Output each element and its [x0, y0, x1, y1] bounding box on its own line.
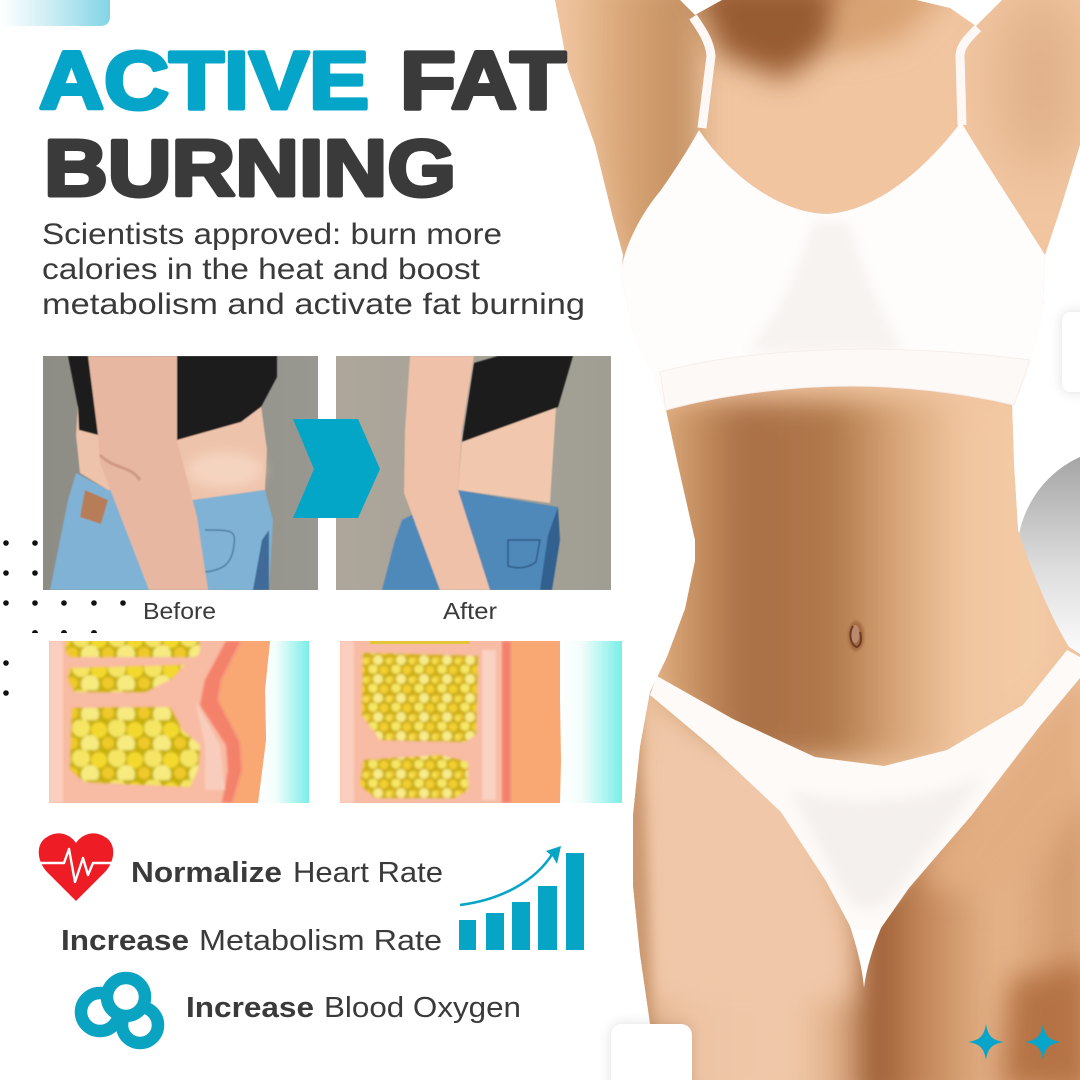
top-left accent bar — [0, 0, 110, 26]
fat tissue diagram: after — [340, 640, 622, 803]
dot grid — [3, 540, 126, 696]
bra straps — [693, 17, 978, 128]
text: increase metabolism rate: Metabolism Rate — [199, 925, 442, 957]
subtitle line 2: calories in the heat and boost — [42, 253, 481, 286]
skin — [540, 0, 1080, 1080]
gap between thighs — [850, 926, 881, 988]
decorative grey circle — [1017, 447, 1080, 663]
side card — [1062, 312, 1080, 392]
title word FAT: FAT — [400, 36, 566, 126]
text: normalize heart rate: Normalize — [131, 857, 282, 889]
navel — [848, 621, 864, 651]
after photo — [336, 356, 611, 590]
text: normalize heart rate: Heart Rate — [293, 857, 443, 889]
white bra — [621, 122, 1045, 410]
fat tissue diagram: before — [49, 639, 309, 803]
subtitle line 3: metabolism and activate fat burning — [42, 288, 585, 321]
sparkle stars — [968, 1024, 1061, 1060]
benefit: heart rate — [39, 833, 443, 901]
bottom card — [611, 1024, 692, 1080]
benefit: blood oxygen — [81, 978, 521, 1043]
icon: oxygen rings — [81, 978, 158, 1043]
text: increase blood oxygen: Increase — [186, 992, 314, 1024]
subtitle — [42, 218, 585, 321]
title — [39, 36, 566, 212]
chevron arrow — [293, 419, 380, 518]
label: before: Before — [143, 598, 216, 624]
title word BURNING: BURNING — [44, 124, 456, 212]
icon: rising bar chart — [459, 846, 584, 950]
model figure — [540, 0, 1080, 1080]
subtitle line 1: Scientists approved: burn more — [42, 218, 502, 251]
before photo — [43, 356, 318, 590]
label: after: After — [443, 598, 497, 624]
icon: heart with pulse — [39, 833, 113, 901]
text: increase blood oxygen: Blood Oxygen — [324, 992, 521, 1024]
benefit: metabolism rate — [61, 846, 584, 957]
white briefs — [650, 650, 1080, 931]
text: increase metabolism rate: Increase — [61, 925, 189, 957]
title word ACTIVE: ACTIVE — [39, 36, 369, 126]
